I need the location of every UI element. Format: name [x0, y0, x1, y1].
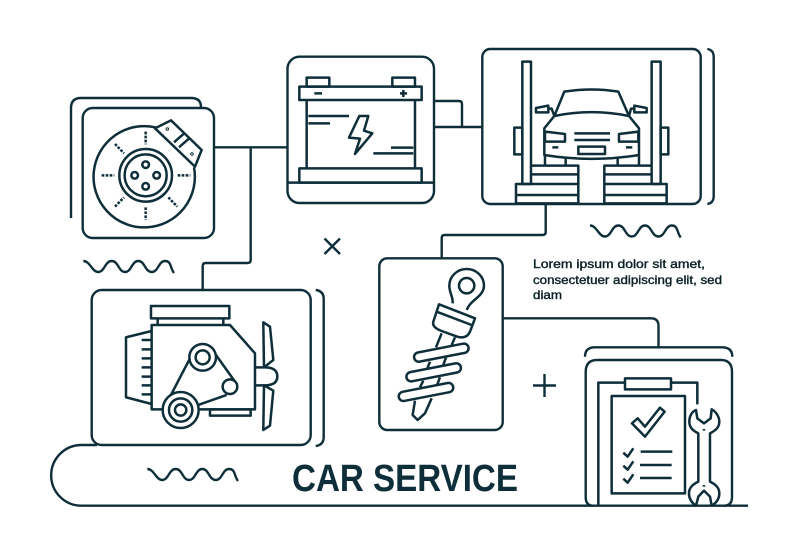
- baseline band: [51, 445, 748, 506]
- icon: wrench: [689, 409, 719, 506]
- shock panel frame: [379, 258, 503, 430]
- text block: [533, 257, 722, 302]
- text line 1: Lorem ipsum dolor sit amet,: [533, 257, 705, 271]
- engine panel frame: [92, 290, 324, 446]
- panel: battery: [287, 57, 434, 203]
- title: CAR SERVICE: [292, 458, 518, 500]
- icon: clipboard: [598, 378, 697, 506]
- icon: battery: [287, 78, 434, 183]
- connector lines: [203, 101, 658, 347]
- icon: car on lift: [514, 62, 668, 203]
- icon: plus mark: [533, 374, 556, 397]
- battery panel frame: [288, 57, 434, 203]
- panel: engine: [92, 290, 324, 446]
- clipboard panel frame: [585, 347, 732, 506]
- panel: brake disc: [71, 98, 214, 238]
- brake panel frame: [71, 98, 214, 238]
- squiggle under brake: [83, 261, 174, 273]
- text line 2: consectetuer adipiscing elit, sed: [533, 273, 722, 287]
- panel: clipboard and wrench: [585, 347, 732, 506]
- icon: engine: [126, 306, 277, 430]
- icon: cross mark: [324, 238, 340, 254]
- text line 3: diam: [533, 288, 562, 302]
- icon: shock absorber: [398, 269, 484, 420]
- icon: brake disc: [94, 120, 202, 227]
- panel: shock absorber: [379, 258, 503, 430]
- panel: car lift: [482, 49, 714, 204]
- squiggle above title: [147, 469, 238, 481]
- squiggle under lift: [590, 226, 681, 238]
- lift panel frame: [482, 49, 714, 204]
